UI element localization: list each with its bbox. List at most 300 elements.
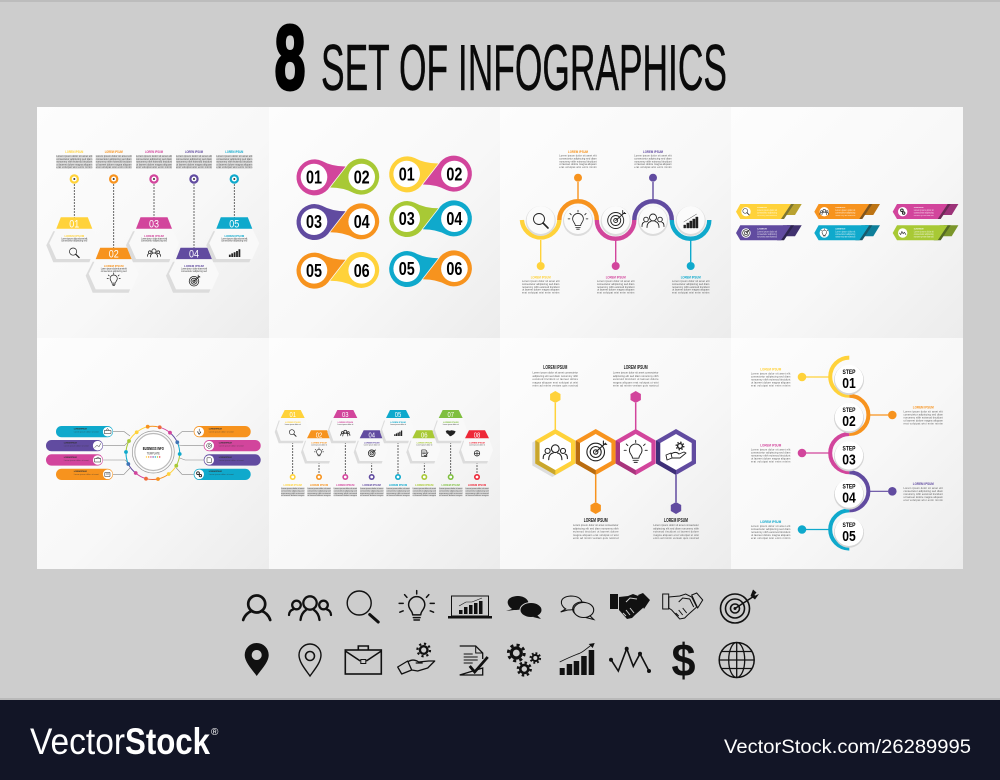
step 04: LOREM IPSUM	[364, 442, 380, 444]
step 05: consectetur adipiscing sed	[221, 240, 248, 243]
text blocks: ut laoreet dolore magna aliquam	[597, 289, 634, 292]
step 05: Lorem ipsum dolor sit amet	[386, 487, 410, 490]
step 05: LOREM IPSUM	[224, 234, 245, 238]
icon: globe	[719, 642, 754, 678]
step 06: Lorem ipsum dolor sit	[416, 443, 433, 446]
text blocks: Lorem ipsum dolor sit amet elit	[559, 154, 597, 158]
pills right: LOREM IPSUM	[209, 428, 222, 430]
step 04: LOREM IPSUM	[185, 150, 203, 154]
step 05 circle: STEP	[842, 522, 856, 529]
banner green: LOREM IPSUM	[914, 228, 924, 230]
text blocks: adipiscing elit sed diam nonummy nibh	[573, 527, 619, 530]
step 02: ut laoreet dolore magna aliquam	[96, 163, 132, 166]
pills right: LOREM IPSUM	[209, 471, 222, 473]
text blocks: magna aliquam erat volutpat ut wisi	[532, 381, 578, 384]
text blocks: Lorem ipsum dolor sit amet elit	[751, 372, 791, 376]
icon: people	[642, 214, 664, 228]
step 04: consectetur adipiscing sed	[181, 270, 208, 273]
step 03: nonummy nibh euismod	[334, 493, 358, 495]
text blocks: erat volutpat wisi enim minim	[597, 292, 634, 295]
panel: hexagon timeline five steps	[46, 150, 259, 293]
step 01	[275, 410, 309, 497]
step 01: Lorem ipsum dolor sit amet elit	[56, 155, 93, 158]
step 01: Lorem ipsum dolor sit amet	[281, 487, 305, 490]
step 05: LOREM IPSUM	[390, 422, 406, 424]
icon: dollar sign: $	[672, 634, 696, 686]
banner cyan: nonummy nibh euismod	[835, 236, 856, 238]
step 04: 04	[368, 430, 375, 439]
text blocks: consectetur adipiscing sed diam	[904, 414, 943, 416]
step 08: consectetur adipiscing sed	[465, 490, 489, 492]
text blocks: LOREM IPSUM	[606, 274, 626, 280]
step 04: nonummy nibh euismod	[360, 493, 384, 495]
badge 05 06 cyan orange	[389, 250, 472, 287]
wave arcs	[522, 201, 709, 239]
icon: target with arrow	[720, 590, 759, 623]
icon: three gears	[508, 645, 540, 675]
hexagon orange target	[576, 429, 616, 475]
text blocks: ut laoreet dolore magna aliquam	[751, 458, 790, 460]
text blocks: LOREM IPSUM	[531, 274, 551, 280]
step 01: consectetur adipiscing sed	[61, 240, 88, 243]
step 02: Lorem ipsum dolor sit amet elit	[101, 268, 127, 271]
step 05: 05	[395, 410, 401, 419]
hexagon purple hand gear	[656, 429, 696, 475]
step 03: consectetur adipiscing sed	[334, 490, 358, 492]
step 03: Lorem ipsum dolor sit amet elit	[136, 155, 172, 158]
step 08: ut laoreet dolore magna	[465, 494, 489, 497]
text blocks: ut laoreet dolore magna aliquam	[522, 289, 559, 292]
banner orange	[814, 204, 880, 219]
centre circle: BUSINESS INFO	[143, 446, 164, 451]
banner green: Lorem ipsum dolor sit	[914, 230, 934, 233]
logo: Stock	[125, 721, 210, 762]
pills right	[194, 426, 261, 480]
step 08	[459, 430, 493, 497]
text blocks: erat volutpat wisi enim minim	[559, 166, 597, 169]
text blocks	[532, 365, 699, 540]
step 04: Lorem ipsum dolor sit	[364, 443, 380, 446]
step 03: Lorem ipsum dolor sit	[337, 423, 354, 426]
step 03: 03	[149, 218, 159, 230]
bead ring	[126, 426, 180, 480]
step 04: LOREM IPSUM	[184, 264, 205, 268]
text blocks: nonummy nibh euismod tincidunt	[751, 454, 791, 458]
banner magenta: LOREM IPSUM	[914, 207, 924, 209]
step 06: 06	[421, 430, 428, 439]
banner magenta: consectetur adipiscing	[914, 212, 934, 214]
step 05: LOREM IPSUM	[225, 150, 243, 154]
text blocks: ut laoreet dolore magna aliquam	[634, 163, 672, 166]
title: 8	[274, 7, 306, 109]
step 02: 02	[316, 430, 322, 439]
text blocks: enim ad minim veniam quis nostrud	[613, 385, 659, 388]
step 01 circle	[834, 365, 864, 395]
step 06	[406, 430, 440, 497]
step 03 circle: STEP	[842, 445, 856, 452]
step 06: consectetur adipiscing sed	[413, 490, 437, 492]
step 01: LOREM IPSUM	[284, 483, 302, 487]
text blocks: ut laoreet dolore magna aliquam	[904, 496, 943, 499]
text blocks: LOREM IPSUM	[760, 366, 782, 372]
icon: filled location pin	[245, 643, 269, 676]
stems and dots	[537, 174, 695, 270]
banner cyan	[814, 225, 880, 240]
step 01: nonummy nibh euismod tincidunt	[56, 161, 93, 164]
text blocks: enim ad minim veniam quis nostrud	[653, 537, 699, 540]
text blocks: consectetur adipiscing sed diam	[672, 283, 709, 286]
step 08: Lorem ipsum dolor sit amet	[465, 487, 489, 490]
step 02: LOREM IPSUM	[311, 442, 327, 444]
step 05: ut laoreet dolore magna aliquam	[216, 163, 252, 166]
text blocks: Lorem ipsum dolor sit amet consectetur	[573, 524, 619, 527]
pills right: LOREM IPSUM	[219, 457, 232, 459]
step 05: Lorem ipsum dolor sit amet elit	[216, 155, 253, 158]
step 01: ut laoreet dolore magna aliquam	[56, 163, 92, 166]
banner yellow: Lorem ipsum dolor sit	[757, 209, 777, 212]
text blocks: ut laoreet dolore magna aliquam	[559, 163, 597, 166]
badge 05 06 orange yellow: 06	[354, 261, 370, 281]
step 01 circle: STEP	[842, 369, 856, 376]
icon: laptop with chart	[448, 596, 492, 618]
banner green	[893, 225, 958, 240]
step 01 circle: 01	[842, 375, 856, 392]
text blocks: magna aliquam erat volutpat ut wisi	[653, 534, 699, 537]
text blocks: adipiscing elit sed diam nonummy nibh	[653, 527, 699, 530]
text blocks: Lorem ipsum dolor sit amet elit	[522, 280, 560, 283]
step 03 circle	[834, 441, 864, 471]
step 07: 07	[447, 410, 454, 419]
text blocks: nonummy nibh euismod tincidunt	[597, 286, 635, 289]
step 06: LOREM IPSUM	[417, 442, 432, 444]
step 03: nonummy nibh euismod tincidunt	[136, 161, 172, 164]
banner purple: LOREM IPSUM	[757, 228, 767, 230]
step 04: nonummy nibh euismod tincidunt	[176, 161, 212, 164]
text blocks: Lorem ipsum dolor sit amet consectetur	[613, 372, 659, 374]
text blocks: adipiscing elit sed diam nonummy nibh	[613, 375, 659, 378]
text blocks: magna aliquam erat volutpat ut wisi	[613, 381, 659, 384]
icon: magnifying glass	[347, 591, 378, 622]
text blocks: ut laoreet dolore magna aliquam	[751, 382, 790, 384]
banner purple: Lorem ipsum dolor sit	[757, 230, 777, 233]
watermark footer band	[0, 698, 1000, 780]
step 02: Lorem ipsum dolor sit	[311, 443, 327, 446]
banner cyan: Lorem ipsum dolor sit	[835, 230, 856, 233]
icon: target	[608, 210, 626, 228]
banner yellow: nonummy nibh euismod	[757, 215, 778, 217]
text blocks: euismod tincidunt ut laoreet dolore	[573, 531, 619, 534]
banner orange: nonummy nibh euismod	[835, 215, 856, 217]
text blocks: nonummy nibh euismod tincidunt	[904, 416, 943, 420]
step 08: LOREM IPSUM	[469, 442, 485, 444]
title	[274, 7, 727, 109]
panel: vertical five steps	[751, 358, 943, 549]
text blocks: LOREM IPSUM	[681, 274, 701, 280]
text blocks: LOREM IPSUM	[643, 149, 663, 154]
step 04 circle: 04	[842, 490, 856, 507]
text blocks: erat volutpat wisi enim minim	[634, 166, 672, 169]
text blocks: consectetur adipiscing sed diam	[559, 157, 597, 160]
step 04: consectetur adipiscing sed diam	[176, 158, 212, 161]
badge 03 04 purple orange: 04	[354, 212, 370, 232]
icon: growth chart	[560, 643, 595, 675]
banner magenta	[893, 204, 958, 219]
step 03: Lorem ipsum dolor sit amet	[334, 487, 357, 490]
banner purple	[736, 225, 802, 240]
step 06: nonummy nibh euismod	[413, 493, 437, 495]
panel: connected hexagon row	[532, 365, 699, 540]
banner green: nonummy nibh euismod	[914, 236, 934, 238]
step 07: LOREM IPSUM	[443, 422, 459, 424]
step 07: Lorem ipsum dolor sit amet	[439, 487, 463, 490]
step 01: LOREM IPSUM	[65, 150, 83, 154]
badge 05 06 cyan orange: 05	[399, 259, 415, 279]
icon: group of people	[289, 596, 331, 620]
step 02: LOREM IPSUM	[104, 264, 124, 268]
text blocks: consectetur adipiscing sed diam	[751, 528, 790, 531]
icon: briefcase	[345, 646, 381, 674]
text blocks: consectetur adipiscing sed diam	[751, 376, 790, 378]
badge 01 02 magenta green: 02	[354, 168, 370, 188]
step 01: consectetur adipiscing sed	[281, 490, 305, 492]
step 08: Lorem ipsum dolor sit	[469, 443, 485, 446]
step 01	[46, 150, 99, 262]
step 05: erat volutpat wisi enim minim	[216, 166, 252, 169]
step 04 circle	[834, 479, 864, 510]
step 04: Lorem ipsum dolor sit amet	[360, 487, 384, 490]
badge 01 02 magenta green: 01	[306, 168, 322, 188]
step 04	[166, 150, 219, 293]
step 08: 08	[474, 430, 480, 439]
icon: outlined chat bubbles	[561, 596, 594, 620]
text blocks: nonummy nibh euismod tincidunt	[751, 378, 791, 382]
text blocks: LOREM IPSUM	[913, 481, 934, 486]
step 03: LOREM IPSUM	[336, 483, 354, 487]
text blocks: Lorem ipsum dolor sit amet elit	[904, 487, 943, 490]
text blocks: Lorem ipsum dolor sit amet elit	[672, 280, 710, 283]
banner cyan: LOREM IPSUM	[835, 228, 845, 230]
text blocks: Lorem ipsum dolor sit amet consectetur	[653, 524, 699, 527]
step 02: Lorem ipsum dolor sit amet	[307, 487, 331, 490]
step 03: ut laoreet dolore magna	[334, 494, 358, 497]
text blocks: consectetur adipiscing sed diam	[904, 490, 943, 493]
text blocks: nonummy nibh euismod tincidunt	[904, 493, 943, 496]
step 04: erat volutpat wisi enim minim	[176, 166, 212, 169]
icon: growth bars	[684, 214, 698, 228]
pills left	[46, 426, 113, 480]
step 03: LOREM IPSUM	[144, 234, 165, 238]
text blocks: Lorem ipsum dolor sit amet elit	[634, 154, 672, 158]
text blocks: euismod tincidunt ut laoreet dolore	[653, 531, 699, 534]
step 07: ut laoreet dolore magna	[439, 494, 463, 497]
banner green: consectetur adipiscing	[914, 233, 934, 236]
step 03	[126, 150, 179, 262]
step 05: Lorem ipsum dolor sit amet elit	[221, 237, 248, 240]
text blocks: adipiscing elit sed diam nonummy nibh	[532, 375, 579, 378]
text blocks: consectetur adipiscing sed diam	[597, 283, 634, 286]
centre circle: TEMPLATE	[147, 451, 160, 455]
text blocks: consectetur adipiscing sed diam	[751, 452, 790, 454]
text blocks: nonummy nibh euismod tincidunt	[672, 286, 710, 289]
step 03: ut laoreet dolore magna aliquam	[136, 163, 172, 166]
banner magenta: nonummy nibh euismod	[914, 215, 934, 217]
badge 01 02 yellow magenta: 01	[399, 164, 415, 184]
step 04: Lorem ipsum dolor sit amet elit	[181, 268, 207, 271]
panel: wavy circle timeline	[522, 149, 710, 295]
badge 01 02 yellow magenta: 02	[446, 164, 462, 184]
text blocks: erat volutpat wisi enim minim	[751, 384, 790, 388]
icon: zigzag line	[610, 647, 650, 672]
step 04 circle: STEP	[842, 484, 856, 491]
pills left: Lorem ipsum dolor sit amet	[64, 459, 89, 462]
text blocks: Lorem ipsum dolor sit amet consectetur	[532, 372, 578, 374]
white icon circles	[526, 206, 706, 236]
pills left: LOREM IPSUM	[74, 471, 87, 473]
step 03 circle: 03	[842, 451, 856, 468]
step 03: consectetur adipiscing sed diam	[136, 158, 172, 161]
text blocks: magna aliquam erat volutpat ut wisi	[573, 534, 619, 537]
hexagon magenta bulb	[616, 429, 656, 475]
text blocks: ut laoreet dolore magna aliquam	[904, 420, 943, 422]
banner orange: LOREM IPSUM	[835, 207, 845, 209]
text blocks: LOREM IPSUM	[913, 404, 934, 410]
text blocks: erat volutpat wisi enim minim	[522, 292, 559, 295]
badge 05 06 orange yellow	[296, 252, 379, 289]
icon: outlined handshake	[663, 593, 703, 619]
text blocks: erat volutpat wisi enim minim	[751, 460, 790, 464]
icon: hand holding gear	[398, 644, 435, 674]
banner purple: consectetur adipiscing	[757, 233, 778, 236]
step 04: 04	[189, 249, 199, 261]
banner orange: Lorem ipsum dolor sit	[835, 209, 856, 212]
pills right: LOREM IPSUM	[219, 442, 232, 444]
icon: filled chat bubbles	[506, 596, 542, 619]
step 02 circle: 02	[842, 413, 856, 430]
text blocks: LOREM IPSUM	[624, 365, 648, 371]
icon: filled handshake	[610, 593, 650, 619]
step 05: Lorem ipsum dolor sit	[390, 423, 406, 426]
text blocks: erat volutpat wisi enim minim	[751, 537, 790, 540]
pills left: LOREM IPSUM	[64, 442, 77, 444]
step 01: LOREM IPSUM	[64, 234, 85, 238]
pills right: Lorem ipsum dolor sit amet	[219, 459, 244, 462]
badge 03 04 purple orange: 03	[306, 212, 322, 232]
curved segments	[830, 358, 868, 549]
step 02: LOREM IPSUM	[310, 483, 328, 487]
step 01: consectetur adipiscing sed diam	[56, 158, 92, 161]
text blocks: enim ad minim veniam quis nostrud	[532, 385, 579, 388]
text blocks: consectetur adipiscing sed diam	[634, 157, 672, 160]
icon: outlined location pin	[299, 644, 321, 676]
step 01: 01	[69, 218, 79, 230]
image id: VectorStock.com/26289995	[724, 736, 971, 758]
step 07: consectetur adipiscing sed	[439, 490, 463, 492]
text blocks: nonummy nibh euismod tincidunt	[559, 160, 597, 163]
text blocks: euismod tincidunt ut laoreet dolore	[613, 378, 659, 381]
step 02: erat volutpat wisi enim minim	[96, 166, 132, 169]
stems and dots	[798, 373, 897, 534]
text blocks: nonummy nibh euismod tincidunt	[751, 531, 791, 534]
pill mini icons	[95, 428, 212, 477]
pills left: Lorem ipsum dolor sit amet	[64, 444, 89, 448]
badge 03 04 purple orange	[296, 203, 379, 240]
step 04: ut laoreet dolore magna	[360, 494, 384, 497]
text blocks: euismod tincidunt ut laoreet dolore	[532, 378, 579, 381]
step 03: consectetur adipiscing sed	[141, 240, 168, 243]
text blocks: LOREM IPSUM	[664, 518, 688, 524]
text blocks: LOREM IPSUM	[760, 442, 782, 448]
step 04: consectetur adipiscing sed	[360, 490, 384, 492]
banner purple: nonummy nibh euismod	[757, 236, 778, 238]
step 08: LOREM IPSUM	[468, 483, 486, 487]
text blocks: enim ad minim veniam quis nostrud	[573, 537, 619, 540]
step 02: nonummy nibh euismod tincidunt	[96, 161, 132, 164]
step 02: ut laoreet dolore magna	[307, 494, 331, 497]
stems and small hexagons	[550, 391, 681, 514]
badge 03 04 green cyan	[389, 200, 472, 237]
step 05: LOREM IPSUM	[389, 483, 407, 487]
banner yellow	[736, 204, 802, 219]
icon: person	[243, 596, 270, 620]
badge 01 02 yellow magenta	[389, 156, 472, 192]
step 02: consectetur adipiscing sed	[101, 270, 127, 273]
icon: bulb	[568, 210, 588, 229]
pills left: LOREM IPSUM	[64, 457, 77, 459]
text blocks: consectetur adipiscing sed diam	[522, 283, 559, 286]
pills left: Lorem ipsum dolor sit amet	[74, 430, 99, 434]
panel: eight step hexagon timeline	[275, 410, 493, 497]
step 02: 02	[109, 249, 119, 261]
banner yellow: consectetur adipiscing	[757, 212, 778, 214]
step 05	[380, 410, 414, 497]
pills right: Lorem ipsum dolor sit amet	[209, 430, 234, 434]
text blocks	[751, 366, 943, 540]
text blocks: LOREM IPSUM	[543, 365, 567, 371]
step 06: LOREM IPSUM	[415, 483, 433, 487]
step 02: consectetur adipiscing sed diam	[96, 158, 132, 161]
step 02 circle: STEP	[842, 407, 856, 414]
text blocks: Lorem ipsum dolor sit amet elit	[751, 525, 791, 528]
step 05: 05	[229, 218, 239, 230]
step 02 circle	[834, 403, 864, 433]
badge 03 04 green cyan: 03	[399, 209, 415, 229]
connector lines	[103, 432, 204, 474]
text blocks: LOREM IPSUM	[568, 149, 588, 154]
banner orange: consectetur adipiscing	[835, 212, 856, 214]
text blocks: LOREM IPSUM	[584, 518, 608, 524]
step 05: ut laoreet dolore magna	[386, 494, 410, 497]
logo: Vector	[30, 721, 125, 762]
step 05: consectetur adipiscing sed diam	[216, 158, 252, 161]
step 02: LOREM IPSUM	[105, 150, 123, 154]
text blocks: nonummy nibh euismod tincidunt	[634, 160, 672, 163]
step 01: LOREM IPSUM	[285, 422, 301, 424]
panel: numbered figure-eight badges	[296, 156, 472, 289]
step 01: Lorem ipsum dolor sit	[285, 423, 301, 426]
text blocks: ut laoreet dolore magna aliquam	[672, 289, 709, 292]
badge 01 02 magenta green	[296, 159, 379, 195]
step 07: Lorem ipsum dolor sit	[443, 423, 459, 426]
step 02: Lorem ipsum dolor sit amet elit	[96, 155, 132, 158]
step 04: LOREM IPSUM	[363, 483, 381, 487]
step 03: 03	[342, 410, 349, 419]
icon set	[243, 590, 759, 686]
badge 03 04 green cyan: 04	[446, 209, 462, 229]
banner cyan: consectetur adipiscing	[835, 233, 856, 236]
step 01: Lorem ipsum dolor sit amet elit	[61, 237, 88, 240]
step 05: nonummy nibh euismod tincidunt	[216, 161, 253, 164]
step 06: Lorem ipsum dolor sit amet	[413, 487, 436, 490]
